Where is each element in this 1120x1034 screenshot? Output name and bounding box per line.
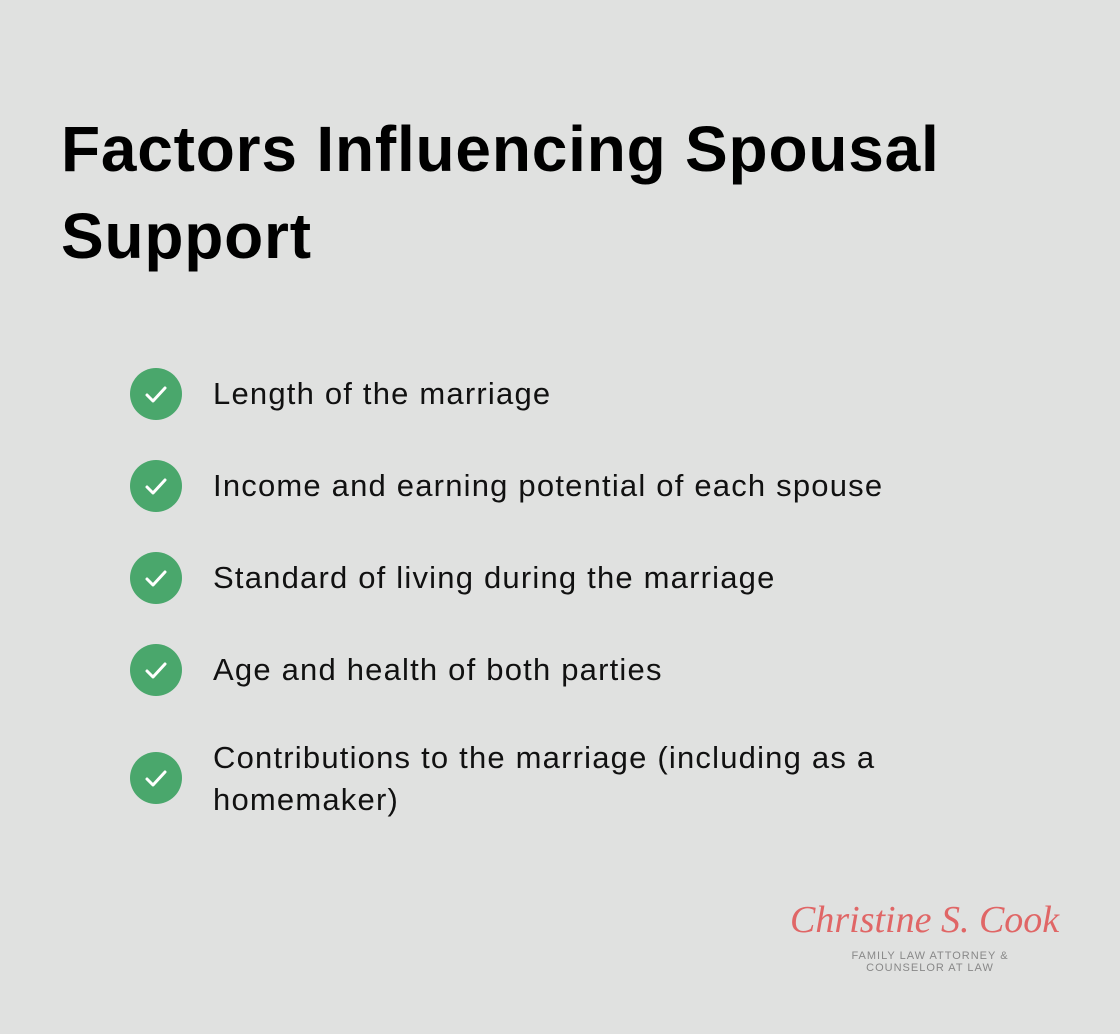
item 1 <box>130 368 551 420</box>
icon: check <box>130 460 182 512</box>
title: Support <box>61 200 312 272</box>
text: Contributions to the marriage (including as a <box>213 740 875 775</box>
icon: check <box>130 644 182 696</box>
logo script name: Christine S. Cook <box>790 899 1059 941</box>
item 4 <box>130 644 663 696</box>
text: Length of the marriage <box>213 376 551 411</box>
logo subtitle: COUNSELOR AT LAW <box>866 962 994 974</box>
icon: check <box>130 552 182 604</box>
icon: check <box>130 368 182 420</box>
text: Age and health of both parties <box>213 652 663 687</box>
item 5 <box>130 740 875 817</box>
title: Factors Influencing Spousal <box>61 113 940 185</box>
item 2 <box>130 460 883 512</box>
logo subtitle: FAMILY LAW ATTORNEY & <box>851 950 1009 962</box>
icon: check <box>130 752 182 804</box>
logo <box>790 899 1060 974</box>
text <box>213 740 875 817</box>
text: Income and earning potential of each spouse <box>213 468 883 503</box>
title <box>61 113 940 272</box>
logo subtitle <box>851 950 1009 974</box>
text: Standard of living during the marriage <box>213 560 776 595</box>
item 3 <box>130 552 776 604</box>
text: homemaker) <box>213 782 399 817</box>
